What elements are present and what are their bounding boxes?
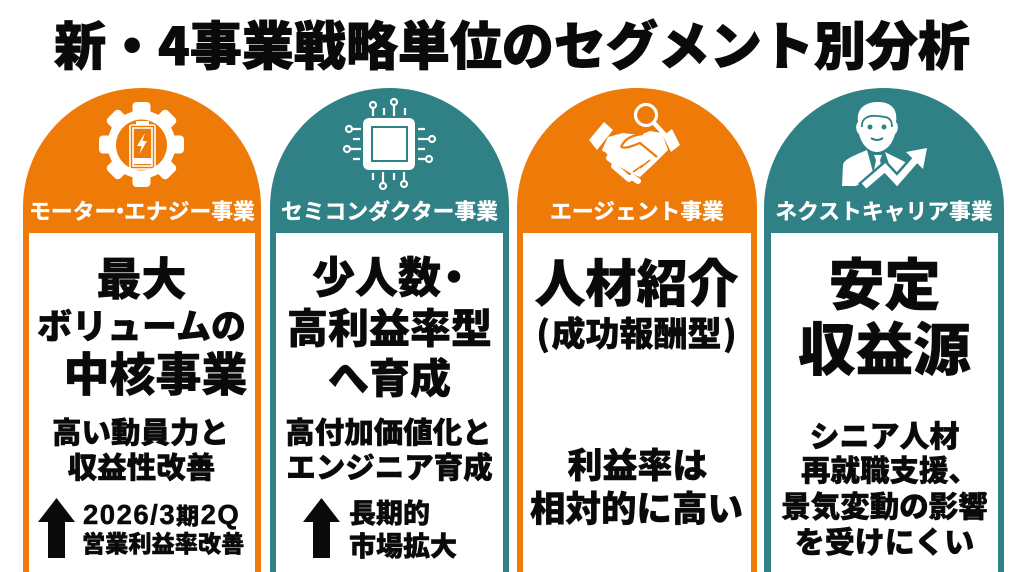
icon: senior person with rising arrow — [842, 102, 927, 189]
content box — [771, 233, 998, 572]
text: long-term market growth — [349, 492, 457, 564]
text: 2026/3 margin improvement — [82, 496, 244, 559]
heading: recruitment: 人材紹介 — [534, 243, 738, 317]
panel: semiconductor — [270, 88, 509, 572]
text: agent description — [530, 438, 743, 532]
arrow: up — [38, 498, 75, 558]
heading: stable revenue: 収益源 — [798, 303, 971, 387]
text: next career description: 景気変動の影響 — [781, 484, 988, 526]
text: next career description — [781, 412, 988, 562]
panel: next career — [764, 88, 1004, 572]
text: next career description: を受けにくい — [795, 518, 974, 562]
title: 新・4事業戦略単位のセグメント別分析 — [54, 5, 970, 80]
icon: chip — [342, 98, 436, 190]
heading: stable revenue: 安定 — [828, 241, 940, 322]
heading: high margin: 少人数・ — [312, 244, 476, 306]
heading: core business: 最大 — [96, 242, 186, 308]
heading: stable revenue — [798, 241, 971, 387]
arrow: up — [303, 498, 340, 558]
content box — [523, 233, 751, 572]
heading: core business — [37, 242, 248, 405]
content box — [276, 233, 503, 572]
text: semiconductor description — [285, 410, 493, 487]
text: semiconductor description: エンジニア育成 — [286, 445, 493, 487]
heading: high margin: 高利益率型 — [287, 295, 492, 355]
heading: core business: ボリュームの — [37, 298, 246, 350]
text: semiconductor description: 高付加価値化と — [285, 410, 492, 452]
text: long-term market growth: 市場拡大 — [349, 524, 457, 564]
text: 2026/3 margin improvement: 営業利益率改善 — [82, 525, 244, 559]
text: next career description: シニア人材 — [810, 412, 960, 456]
text: 2026/3 margin improvement: 2026/3期2Q — [83, 496, 240, 530]
heading: core business: 中核事業 — [64, 339, 248, 405]
text: motor energy description: 高い動員力と — [52, 410, 229, 452]
text: motor energy description — [52, 410, 229, 487]
icon: gear with battery — [99, 102, 184, 187]
heading: high margin — [287, 244, 492, 405]
panel: agent — [517, 88, 757, 572]
label: semiconductor: セミコンダクター事業 — [281, 195, 498, 226]
icon: handshake with magnifier — [589, 102, 680, 184]
text: agent description: 相対的に高い — [530, 480, 743, 532]
label: motor energy: モーター・エナジー事業 — [29, 195, 255, 226]
heading: recruitment — [534, 243, 738, 356]
label: next career: ネクストキャリア事業 — [775, 195, 993, 226]
heading: recruitment: (成功報酬型) — [536, 307, 737, 356]
text: motor energy description: 収益性改善 — [68, 445, 215, 487]
text: agent description: 利益率は — [567, 438, 708, 489]
text: next career description: 再就職支援、 — [801, 448, 978, 490]
heading: high margin: へ育成 — [328, 345, 451, 405]
text: long-term market growth: 長期的 — [349, 492, 430, 530]
label: agent: エージェント事業 — [550, 195, 724, 226]
content box — [29, 233, 255, 572]
panel: motor energy — [23, 88, 261, 572]
